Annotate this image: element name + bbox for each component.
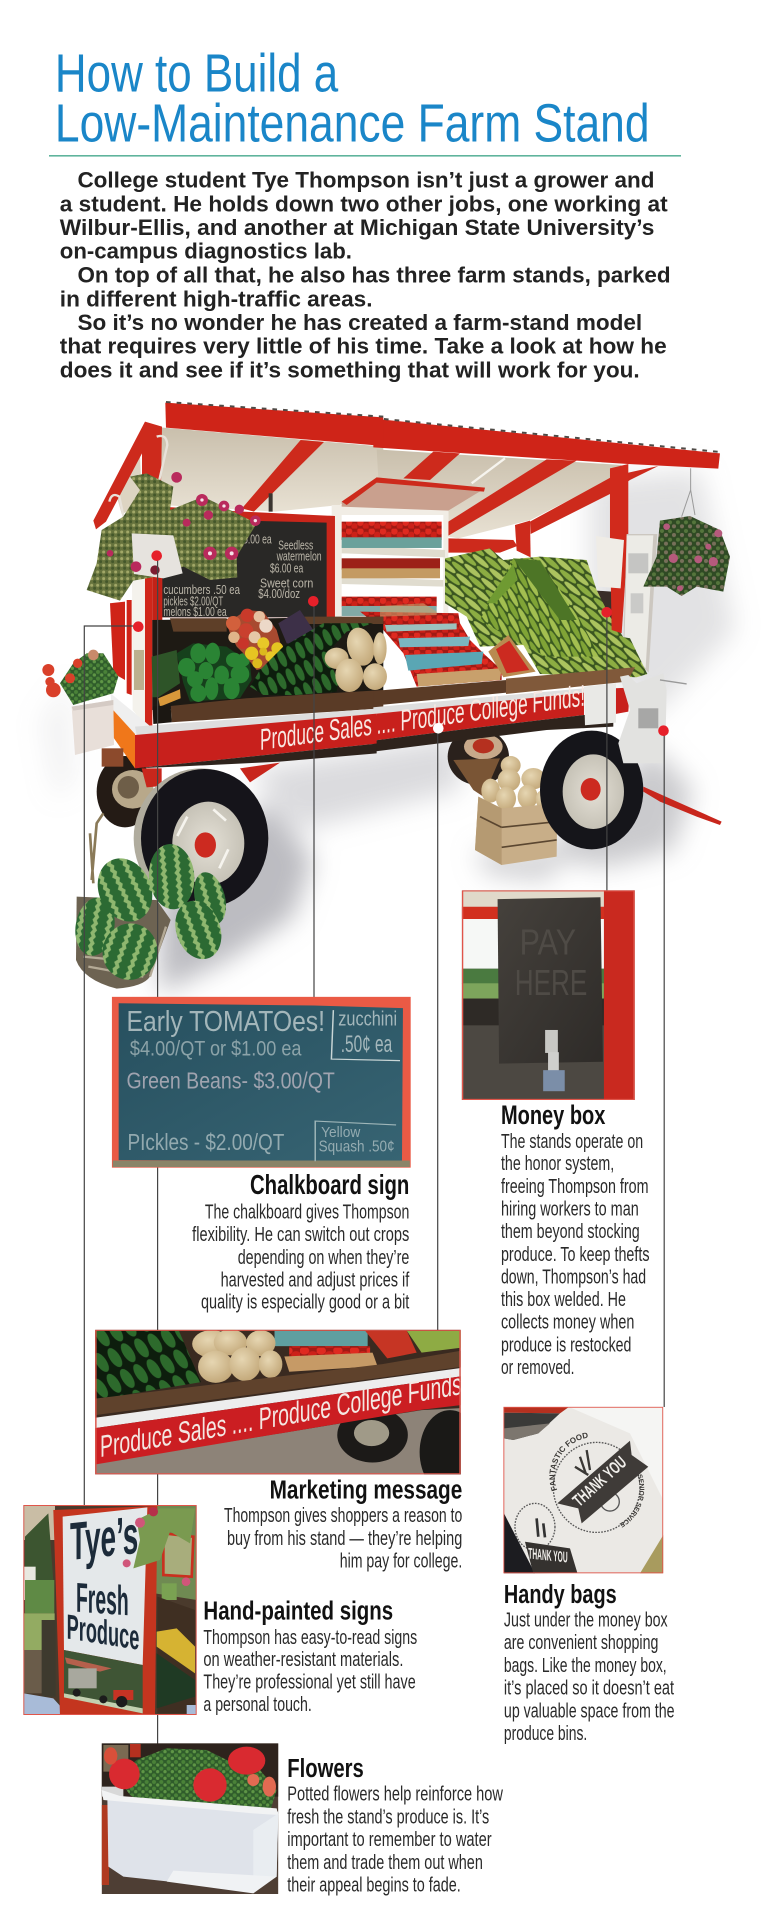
green peppers xyxy=(177,643,252,702)
chalkboard on stand: Sweet corn xyxy=(260,576,313,590)
caption: handy bags xyxy=(504,1579,675,1745)
caption: chalkboard sign: quality is especially good or a bit xyxy=(201,1290,410,1313)
chalk lettering: Yellow xyxy=(321,1124,361,1141)
caption: money box: freeing Thompson from xyxy=(501,1175,649,1197)
caption: marketing message: Marketing message xyxy=(270,1474,462,1504)
green beans xyxy=(152,650,180,697)
caption: flowers xyxy=(287,1753,503,1896)
second bag logo: THANK YOU xyxy=(528,1545,568,1567)
intro paragraph: on-campus diagnostics lab. xyxy=(60,239,352,263)
chalkboard on stand: $6.00 ea xyxy=(270,562,304,576)
corn pile and strawberries xyxy=(360,548,647,687)
bag logo: FANTASTIC FOOD xyxy=(549,1432,588,1492)
chalkboard on stand: cucumbers .50 ea xyxy=(163,583,241,597)
right end of stand xyxy=(373,464,657,752)
sign flowers xyxy=(123,1507,195,1586)
rear right wheel xyxy=(448,728,509,785)
bag logo: SENIOR SERVICE xyxy=(620,1474,644,1528)
intro paragraph: in different high-traffic areas. xyxy=(60,286,373,311)
red side rail xyxy=(373,693,584,741)
bin backing xyxy=(152,617,383,710)
roof and left gable xyxy=(93,422,383,529)
roof underside left xyxy=(160,427,383,512)
text: buy from his stand — they’re helping xyxy=(227,1527,462,1550)
title xyxy=(55,44,650,154)
middle row xyxy=(342,558,440,570)
red flowers xyxy=(104,1747,276,1802)
corn xyxy=(445,548,647,677)
eggplants xyxy=(278,610,317,647)
roof underside right xyxy=(377,449,622,538)
caption: money box: collects money when xyxy=(501,1310,634,1333)
caption: hand-painted signs: on weather-resistant materials. xyxy=(203,1648,403,1671)
tomatoes and yellow peppers xyxy=(226,609,283,670)
front right wheel xyxy=(540,731,643,849)
caption: marketing message xyxy=(224,1474,462,1572)
caption: flowers: their appeal begins to fade. xyxy=(287,1874,461,1896)
caption: handy bags: produce bins. xyxy=(504,1722,587,1745)
caption: flowers: fresh the stand’s produce is. It’s xyxy=(287,1806,489,1828)
title: How to Build a xyxy=(55,44,339,104)
chalk lettering: Early TOMATOes! xyxy=(127,1006,325,1037)
chalkboard on stand: $5.00 ea xyxy=(238,532,272,546)
bin front xyxy=(171,690,383,722)
top row xyxy=(342,522,442,540)
caption: money box: hiring workers to man xyxy=(501,1197,639,1220)
photo: hand-painted sign xyxy=(23,1505,197,1715)
caption: handy bags: Handy bags xyxy=(504,1579,617,1609)
caption: hand-painted signs: a personal touch. xyxy=(203,1693,312,1716)
bag logo xyxy=(549,1432,648,1533)
white planter box xyxy=(107,1798,278,1891)
caption: flowers: Flowers xyxy=(287,1753,364,1783)
text: Potted flowers help reinforce how xyxy=(287,1783,503,1805)
chalkboard on stand: Seedless xyxy=(278,538,313,552)
photo: money box xyxy=(462,890,635,1100)
melons xyxy=(192,1329,282,1383)
roof edge xyxy=(373,419,720,469)
caption: money box: or removed. xyxy=(501,1356,575,1378)
caption: money box: this box welded. He xyxy=(501,1288,626,1310)
watermelons in basket xyxy=(71,813,231,989)
caption: money box: them beyond stocking xyxy=(501,1220,640,1243)
caption: chalkboard sign xyxy=(192,1169,410,1313)
text: They’re professional yet still have xyxy=(203,1671,416,1693)
wagon tongue xyxy=(643,787,722,825)
chalkboard on stand: melons $1.00 ea xyxy=(163,605,227,619)
caption: money box: produce is restocked xyxy=(501,1333,631,1356)
corn spill over post xyxy=(610,635,647,677)
red pepper crate xyxy=(488,635,536,677)
corn husks xyxy=(487,563,517,603)
price note xyxy=(584,683,616,725)
melons xyxy=(325,625,387,692)
bottom row xyxy=(342,597,437,607)
roof edge left xyxy=(165,402,383,446)
caption: chalkboard sign: depending on when they’re xyxy=(238,1246,409,1268)
box lettering xyxy=(515,922,587,1003)
sign lettering: Fresh xyxy=(76,1574,129,1624)
caption: chalkboard sign: flexibility. He can switch out crops xyxy=(192,1223,409,1245)
rafter xyxy=(242,440,324,512)
foliage xyxy=(117,1748,277,1817)
hanging basket right xyxy=(643,468,730,596)
lid xyxy=(342,477,485,511)
bin front xyxy=(373,680,507,706)
chalkboard on stand: watermelon xyxy=(276,550,322,564)
wheels xyxy=(337,1407,408,1463)
box lettering: PAY xyxy=(520,922,576,962)
caption: flowers: important to remember to water xyxy=(287,1829,492,1851)
drop shadow xyxy=(40,470,735,993)
sign lettering xyxy=(67,1506,139,1658)
photo: flowers xyxy=(102,1743,278,1894)
chalk lettering: $4.00/QT or $1.00 ea xyxy=(130,1037,302,1060)
caption: money box: produce. To keep thefts xyxy=(501,1243,650,1265)
callout dots xyxy=(133,550,669,736)
chalkboard on stand xyxy=(161,507,335,619)
leader lines xyxy=(84,556,664,1744)
crate with melons xyxy=(453,756,557,865)
caption: money box: the honor system, xyxy=(501,1152,614,1174)
rear left wheel xyxy=(97,756,153,827)
left produce xyxy=(152,609,387,724)
hanging basket left xyxy=(87,436,261,601)
text: Thompson gives shoppers a reason to xyxy=(224,1504,462,1527)
caption: money box: The stands operate on xyxy=(501,1130,643,1152)
dark backing xyxy=(587,590,612,630)
caption: hand-painted signs xyxy=(203,1596,417,1716)
shelf boards xyxy=(342,545,445,557)
caption: money box: Money box xyxy=(501,1099,605,1130)
back shelf and back post xyxy=(448,538,517,553)
caption: money box: down, Thompson’s had xyxy=(501,1265,646,1288)
miniature wagon picture xyxy=(65,1657,133,1707)
cucumbers xyxy=(250,623,373,695)
wagon bed xyxy=(102,693,377,787)
text: him pay for college. xyxy=(340,1550,462,1572)
intro paragraph xyxy=(60,167,671,382)
farm stand illustration xyxy=(40,402,735,993)
chalkboard on stand: $4.00/doz xyxy=(258,587,300,601)
caption: chalkboard sign: The chalkboard gives Thompson xyxy=(205,1200,409,1223)
signs xyxy=(596,536,624,588)
roof right side xyxy=(373,418,720,557)
shelf cabinet with strawberries xyxy=(332,477,485,618)
chalkboard on stand: pickles $2.00/QT xyxy=(163,594,223,608)
chalk lettering: PIckles - $2.00/QT xyxy=(127,1129,284,1155)
gable xyxy=(115,453,142,514)
planter box with red flowers xyxy=(42,650,118,755)
caption: chalkboard sign: Chalkboard sign xyxy=(250,1169,409,1200)
second bag logo xyxy=(515,1503,577,1573)
front left wheel xyxy=(134,768,268,908)
shopping bag xyxy=(618,673,687,763)
caption: money box xyxy=(501,1099,650,1378)
caption: flowers: them and trade them out when xyxy=(287,1851,483,1874)
caption: chalkboard sign: harvested and adjust prices if xyxy=(221,1268,410,1291)
caption: hand-painted signs: Hand-painted signs xyxy=(203,1596,393,1625)
deck stripe xyxy=(373,688,584,714)
side posts and sign panel xyxy=(110,575,162,726)
photo: handy bags xyxy=(503,1406,664,1574)
right post xyxy=(610,464,628,633)
rafters xyxy=(403,452,460,480)
chalk lettering xyxy=(127,1006,397,1155)
photo: chalkboard sign xyxy=(112,996,411,1168)
strawberry quarts xyxy=(360,603,502,687)
bag logo: THANK YOU xyxy=(569,1452,630,1510)
text: Thompson has easy-to-read signs xyxy=(203,1626,417,1649)
